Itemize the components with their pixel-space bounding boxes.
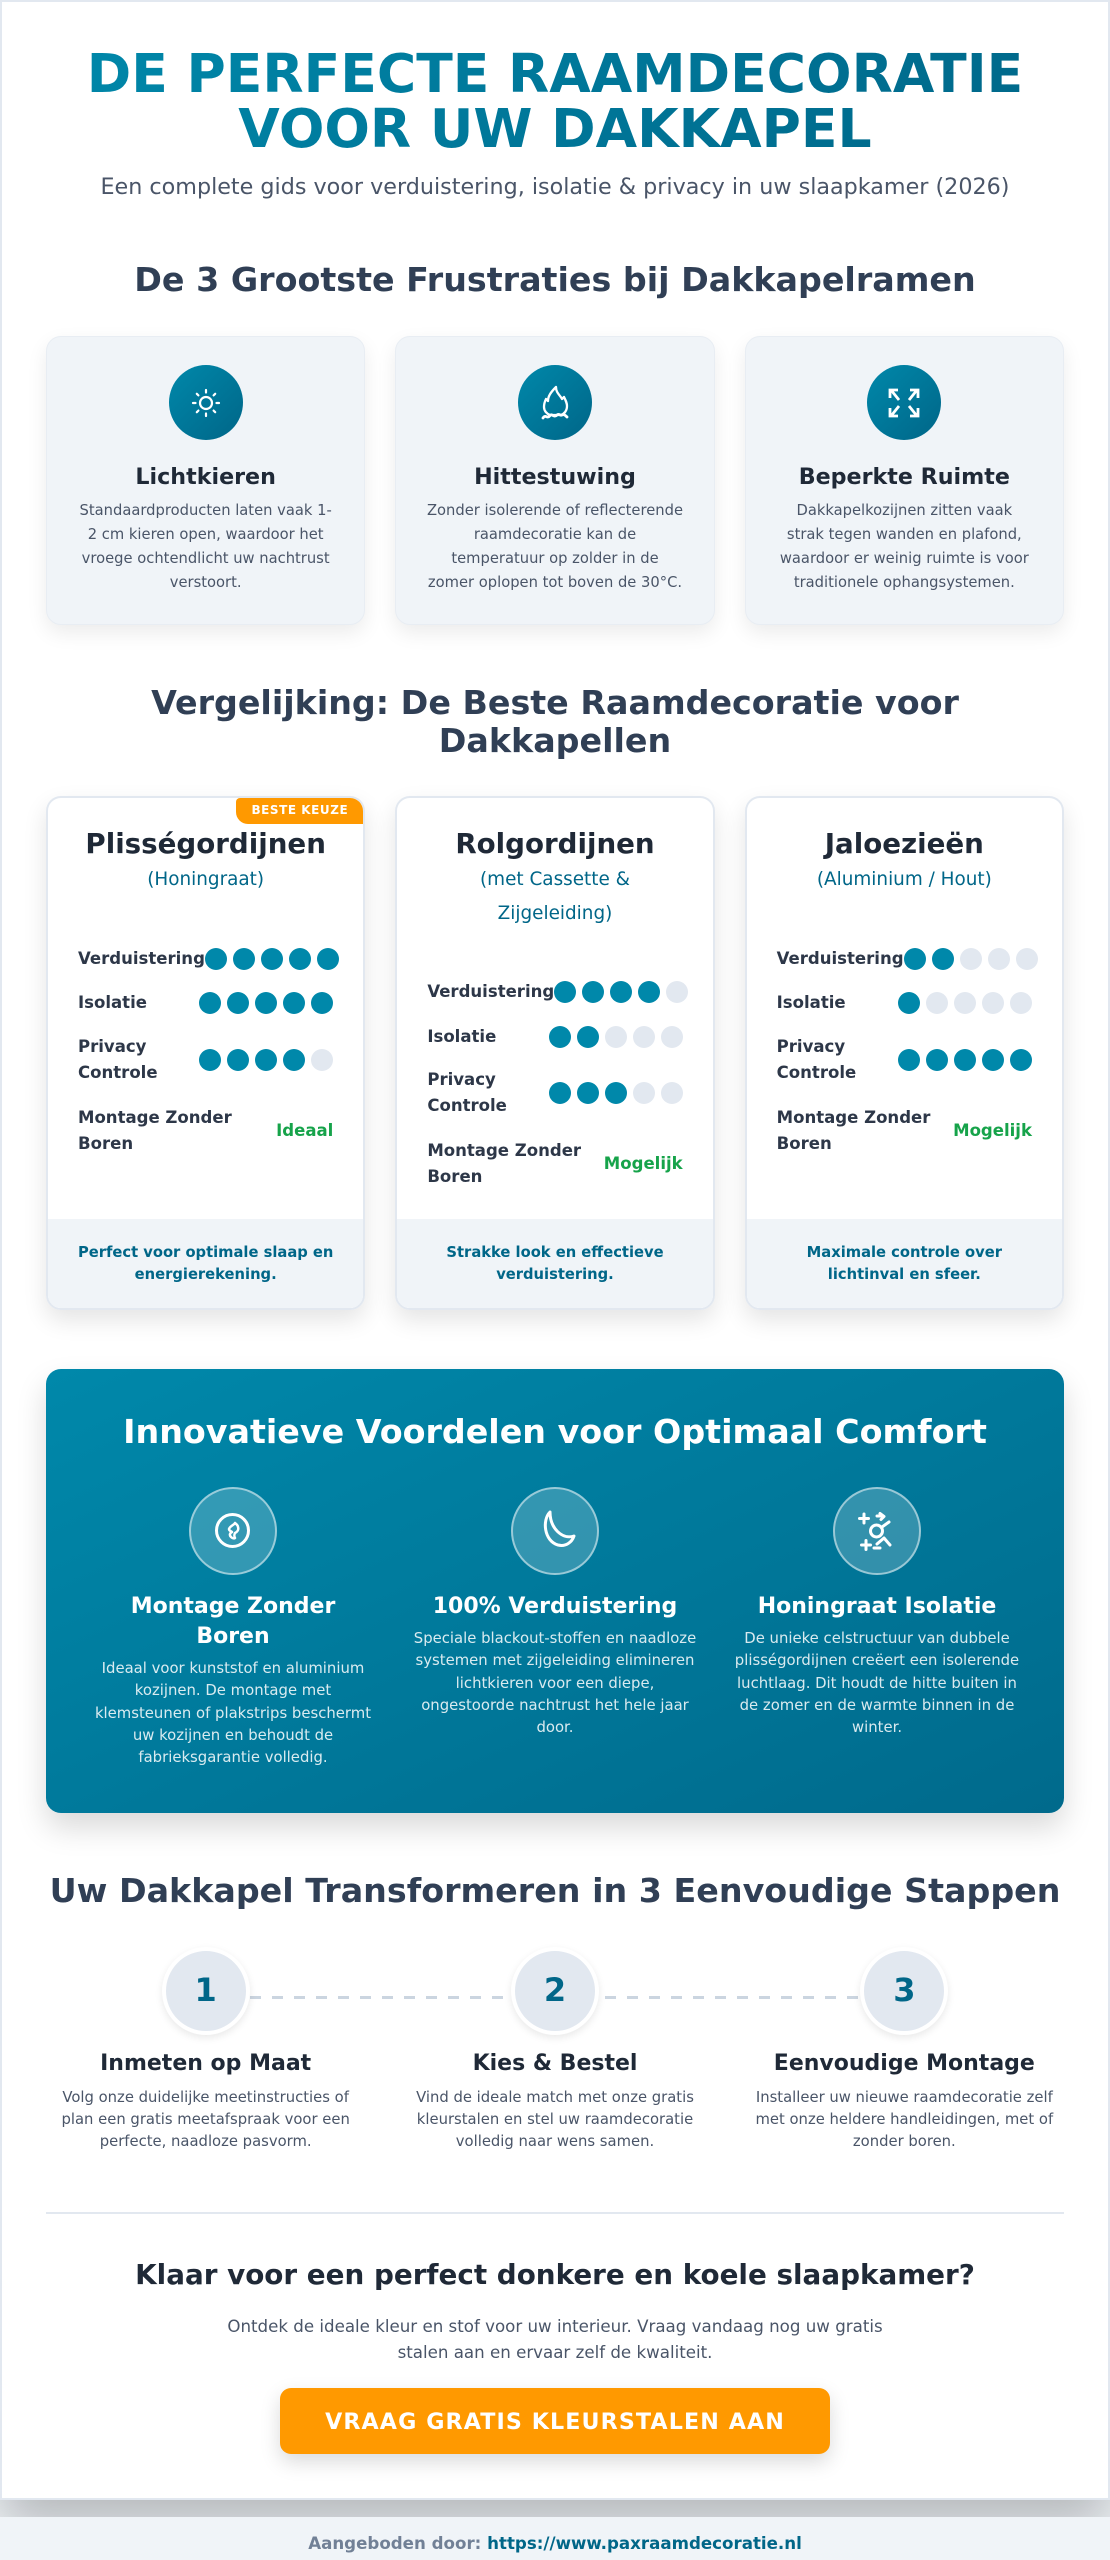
rating: Montage Zonder Boren: Ideaal bbox=[276, 1121, 333, 1140]
card text: strak tegen wanden en plafond, bbox=[787, 526, 1022, 543]
benefit text bbox=[414, 1629, 696, 1736]
footer bbox=[0, 2517, 1110, 2560]
card text: Dakkapelkozijnen zitten vaak bbox=[796, 502, 1012, 519]
rating: Verduistering: Verduistering bbox=[78, 948, 205, 968]
rating: Montage Zonder Boren: Montage Zonder bbox=[427, 1141, 581, 1160]
benefit heading: Montage Zonder bbox=[131, 1594, 335, 1619]
step 1 text: plan een gratis meetafspraak voor een bbox=[61, 2111, 350, 2128]
benefit text bbox=[735, 1629, 1019, 1736]
step 2 text: kleurstalen en stel uw raamdecoratie bbox=[417, 2111, 693, 2128]
card text bbox=[80, 502, 332, 591]
icon: flame bbox=[518, 365, 592, 440]
step number 2: 2 bbox=[544, 1970, 566, 2008]
card text: Standaardproducten laten vaak 1- bbox=[80, 502, 332, 519]
rating: Isolatie: Isolatie bbox=[427, 1026, 496, 1046]
step 3 heading: Eenvoudige Montage bbox=[774, 2051, 1035, 2076]
step 3 text: met onze heldere handleidingen, met of bbox=[755, 2111, 1053, 2128]
rating: Montage Zonder Boren: Boren bbox=[78, 1134, 133, 1152]
benefit text: uw kozijnen en behoudt de bbox=[133, 1726, 333, 1744]
panel: Beperkte Ruimte bbox=[745, 336, 1064, 624]
card text bbox=[780, 502, 1029, 591]
icon: expand arrows bbox=[867, 365, 941, 440]
call to action button bbox=[280, 2388, 830, 2454]
panel shadow wrapper: Jaloezieen bbox=[745, 796, 1064, 1310]
icon: no drilling bbox=[189, 1487, 277, 1575]
rating: Privacy Controle bbox=[78, 1037, 333, 1082]
step number 2 bbox=[511, 1946, 599, 2034]
benefit text: De unieke celstructuur van dubbele bbox=[744, 1629, 1010, 1647]
panel: Plissegordijnen bbox=[46, 796, 365, 1310]
benefit text: klemsteunen of plakstrips beschermt bbox=[95, 1704, 371, 1722]
step 2 text: Vind de ideale match met onze gratis bbox=[416, 2088, 694, 2106]
badge: beste keuze: BESTE KEUZE bbox=[251, 803, 348, 817]
heading: comparison: Dakkapellen bbox=[439, 721, 671, 760]
rating: Montage Zonder Boren: Boren bbox=[777, 1134, 832, 1152]
heading: steps: Uw Dakkapel Transformeren in 3 Eenvoudige Stappen bbox=[50, 1870, 1060, 1910]
call to action text: stalen aan en ervaar zelf de kwaliteit. bbox=[398, 2343, 712, 2362]
title: VOOR UW DAKKAPEL bbox=[238, 97, 872, 160]
product name: Jaloezieën bbox=[825, 827, 984, 860]
rating: Privacy Controle: Controle bbox=[78, 1063, 158, 1082]
rating: Privacy Controle: Privacy bbox=[427, 1070, 496, 1089]
step 1 text: perfecte, naadloze pasvorm. bbox=[100, 2133, 312, 2150]
card text: zomer oplopen tot boven de 30°C. bbox=[428, 574, 682, 591]
panel shadow wrapper: Rolgordijnen bbox=[395, 796, 715, 1310]
benefit text: winter. bbox=[852, 1718, 902, 1736]
step number 3 bbox=[860, 1946, 948, 2034]
heading: frustrations: De 3 Grootste Frustraties bij Dakkapelramen bbox=[134, 260, 976, 298]
benefit text: luchtlaag. Dit houdt de hitte buiten in bbox=[737, 1674, 1017, 1692]
rating: Verduistering bbox=[78, 948, 339, 970]
rating: Isolatie bbox=[78, 992, 333, 1014]
rating: Isolatie bbox=[427, 1026, 683, 1048]
rating: Privacy Controle: Controle bbox=[427, 1096, 507, 1115]
card footer note: Strakke look en effectieve bbox=[446, 1244, 664, 1260]
rating: Montage Zonder Boren: Montage Zonder bbox=[777, 1108, 930, 1126]
step number 1: 1 bbox=[195, 1970, 217, 2008]
rating: Montage Zonder Boren: Montage Zonder bbox=[78, 1108, 232, 1126]
card footer note: Maximale controle over bbox=[807, 1244, 1002, 1260]
title: DE PERFECTE RAAMDECORATIE bbox=[87, 42, 1023, 105]
step number 3: 3 bbox=[893, 1970, 915, 2008]
rating: Montage Zonder Boren: Mogelijk bbox=[953, 1121, 1032, 1140]
call to action heading: Klaar voor een perfect donkere en koele slaapkamer? bbox=[135, 2258, 975, 2291]
rating: Verduistering bbox=[776, 948, 1038, 970]
title bbox=[46, 46, 1064, 157]
card text: vroege ochtendlicht uw nachtrust bbox=[82, 550, 330, 567]
rating: Privacy Controle: Privacy bbox=[78, 1037, 146, 1056]
rating: Privacy Controle: Privacy bbox=[777, 1037, 845, 1056]
panel: Rolgordijnen bbox=[395, 796, 715, 1310]
benefit text: door. bbox=[536, 1718, 574, 1736]
card footer note: verduistering. bbox=[496, 1266, 614, 1282]
step 3 text: Installeer uw nieuwe raamdecoratie zelf bbox=[756, 2088, 1053, 2106]
benefit heading: Honingraat Isolatie bbox=[758, 1594, 996, 1619]
badge: beste keuze bbox=[236, 798, 363, 824]
benefit text: systemen met zijgeleiding elimineren bbox=[416, 1651, 694, 1669]
rating: Isolatie: Isolatie bbox=[78, 993, 147, 1012]
card footer note: energierekening. bbox=[135, 1266, 277, 1282]
benefit text: Ideaal voor kunststof en aluminium bbox=[102, 1659, 364, 1677]
icon: honeycomb insulation bbox=[833, 1487, 921, 1575]
benefit heading: 100% Verduistering bbox=[433, 1594, 677, 1619]
benefit heading: Boren bbox=[196, 1624, 270, 1649]
benefit text: de zomer en de warmte binnen in de bbox=[740, 1696, 1014, 1714]
step 1 text bbox=[61, 2088, 350, 2150]
benefit text: fabrieksgarantie volledig. bbox=[138, 1748, 328, 1766]
benefit text: kozijnen. De montage met bbox=[135, 1681, 331, 1699]
panel: Jaloezieen bbox=[745, 796, 1064, 1310]
card text: waardoor er weinig ruimte is voor bbox=[780, 550, 1029, 567]
card text bbox=[427, 502, 683, 591]
rating: Privacy Controle bbox=[427, 1070, 683, 1115]
benefit text: Speciale blackout-stoffen en naadloze bbox=[414, 1629, 696, 1647]
step 2 text: volledig naar wens samen. bbox=[456, 2133, 654, 2150]
card heading: Lichtkieren bbox=[135, 464, 276, 490]
card footer note bbox=[747, 1219, 1062, 1310]
product type bbox=[480, 869, 630, 924]
step 3 text: zonder boren. bbox=[853, 2133, 956, 2150]
rating: Montage Zonder Boren bbox=[777, 1108, 1032, 1152]
subtitle: Een complete gids voor verduistering, isolatie & privacy in uw slaapkamer (2026) bbox=[100, 174, 1009, 200]
product name: Plisségordijnen bbox=[85, 827, 326, 860]
step 1 heading: Inmeten op Maat bbox=[100, 2051, 311, 2076]
benefits heading: Innovatieve Voordelen voor Optimaal Comfort bbox=[123, 1412, 987, 1451]
card text: traditionele ophangsystemen. bbox=[794, 574, 1015, 591]
icon: sun bbox=[168, 365, 242, 440]
call to action text bbox=[227, 2317, 883, 2362]
panel: Hittestuwing bbox=[395, 336, 715, 624]
rating: Verduistering: Verduistering bbox=[427, 982, 554, 1001]
product type: (Aluminium / Hout) bbox=[817, 869, 992, 890]
rating: Privacy Controle: Controle bbox=[777, 1063, 856, 1082]
panel: innovative benefits bbox=[46, 1369, 1064, 1813]
call to action text: Ontdek de ideale kleur en stof voor uw interieur. Vraag vandaag nog uw gratis bbox=[227, 2317, 883, 2336]
icon: moon bbox=[511, 1487, 599, 1575]
benefit text bbox=[95, 1659, 371, 1766]
call to action button: VRAAG GRATIS KLEURSTALEN AAN bbox=[325, 2409, 785, 2435]
rating: Verduistering bbox=[427, 981, 688, 1003]
rating: Montage Zonder Boren: Mogelijk bbox=[604, 1154, 683, 1173]
connector: step 2 to 3 bbox=[605, 1996, 861, 1999]
card text: Zonder isolerende of reflecterende bbox=[427, 502, 683, 519]
panel shadow wrapper: Plissegordijnen bbox=[46, 796, 365, 1310]
card footer note: Perfect voor optimale slaap en bbox=[78, 1244, 333, 1260]
card text: raamdecoratie kan de bbox=[474, 526, 636, 543]
card text: 2 cm kieren open, waardoor het bbox=[88, 526, 324, 543]
rating: Isolatie bbox=[777, 992, 1032, 1014]
card text: verstoort. bbox=[170, 574, 242, 591]
rating: Privacy Controle bbox=[777, 1037, 1032, 1082]
rating: Montage Zonder Boren: Boren bbox=[427, 1167, 482, 1186]
card footer note bbox=[397, 1219, 713, 1310]
rating: Isolatie: Isolatie bbox=[777, 993, 846, 1012]
card text: temperatuur op zolder in de bbox=[451, 550, 659, 567]
panel: Lichtkieren bbox=[46, 336, 365, 624]
step 1 text: Volg onze duidelijke meetinstructies of bbox=[62, 2088, 349, 2106]
benefit heading bbox=[131, 1594, 336, 1649]
product name: Rolgordijnen bbox=[455, 827, 655, 860]
step 2 text bbox=[416, 2088, 694, 2150]
card heading: Hittestuwing bbox=[474, 464, 636, 490]
product type: Zijgeleiding) bbox=[498, 902, 612, 924]
step 2 heading: Kies & Bestel bbox=[473, 2051, 637, 2076]
benefit text: plisségordijnen creëert een isolerende bbox=[735, 1651, 1019, 1669]
heading: comparison: Vergelijking: De Beste Raamdecoratie voor bbox=[151, 683, 959, 722]
step number 1 bbox=[162, 1946, 250, 2034]
benefit text: lichtkieren voor een diepe, bbox=[456, 1674, 654, 1692]
rating: Montage Zonder Boren bbox=[78, 1108, 333, 1152]
product type: (Honingraat) bbox=[147, 869, 264, 890]
connector: step 1 to 2 bbox=[250, 1996, 506, 1999]
card footer note bbox=[48, 1219, 363, 1310]
card footer note: lichtinval en sfeer. bbox=[828, 1266, 981, 1282]
footer credit: Aangeboden door: https://www.paxraamdecoratie.nl bbox=[308, 2534, 802, 2553]
rating: Montage Zonder Boren bbox=[427, 1141, 683, 1186]
product type: (met Cassette & bbox=[480, 869, 630, 890]
rating: Verduistering: Verduistering bbox=[777, 948, 904, 968]
benefit text: ongestoorde nachtrust het hele jaar bbox=[421, 1696, 689, 1714]
heading: comparison bbox=[151, 683, 959, 760]
step 3 text bbox=[755, 2088, 1054, 2150]
card heading: Beperkte Ruimte bbox=[799, 464, 1010, 490]
